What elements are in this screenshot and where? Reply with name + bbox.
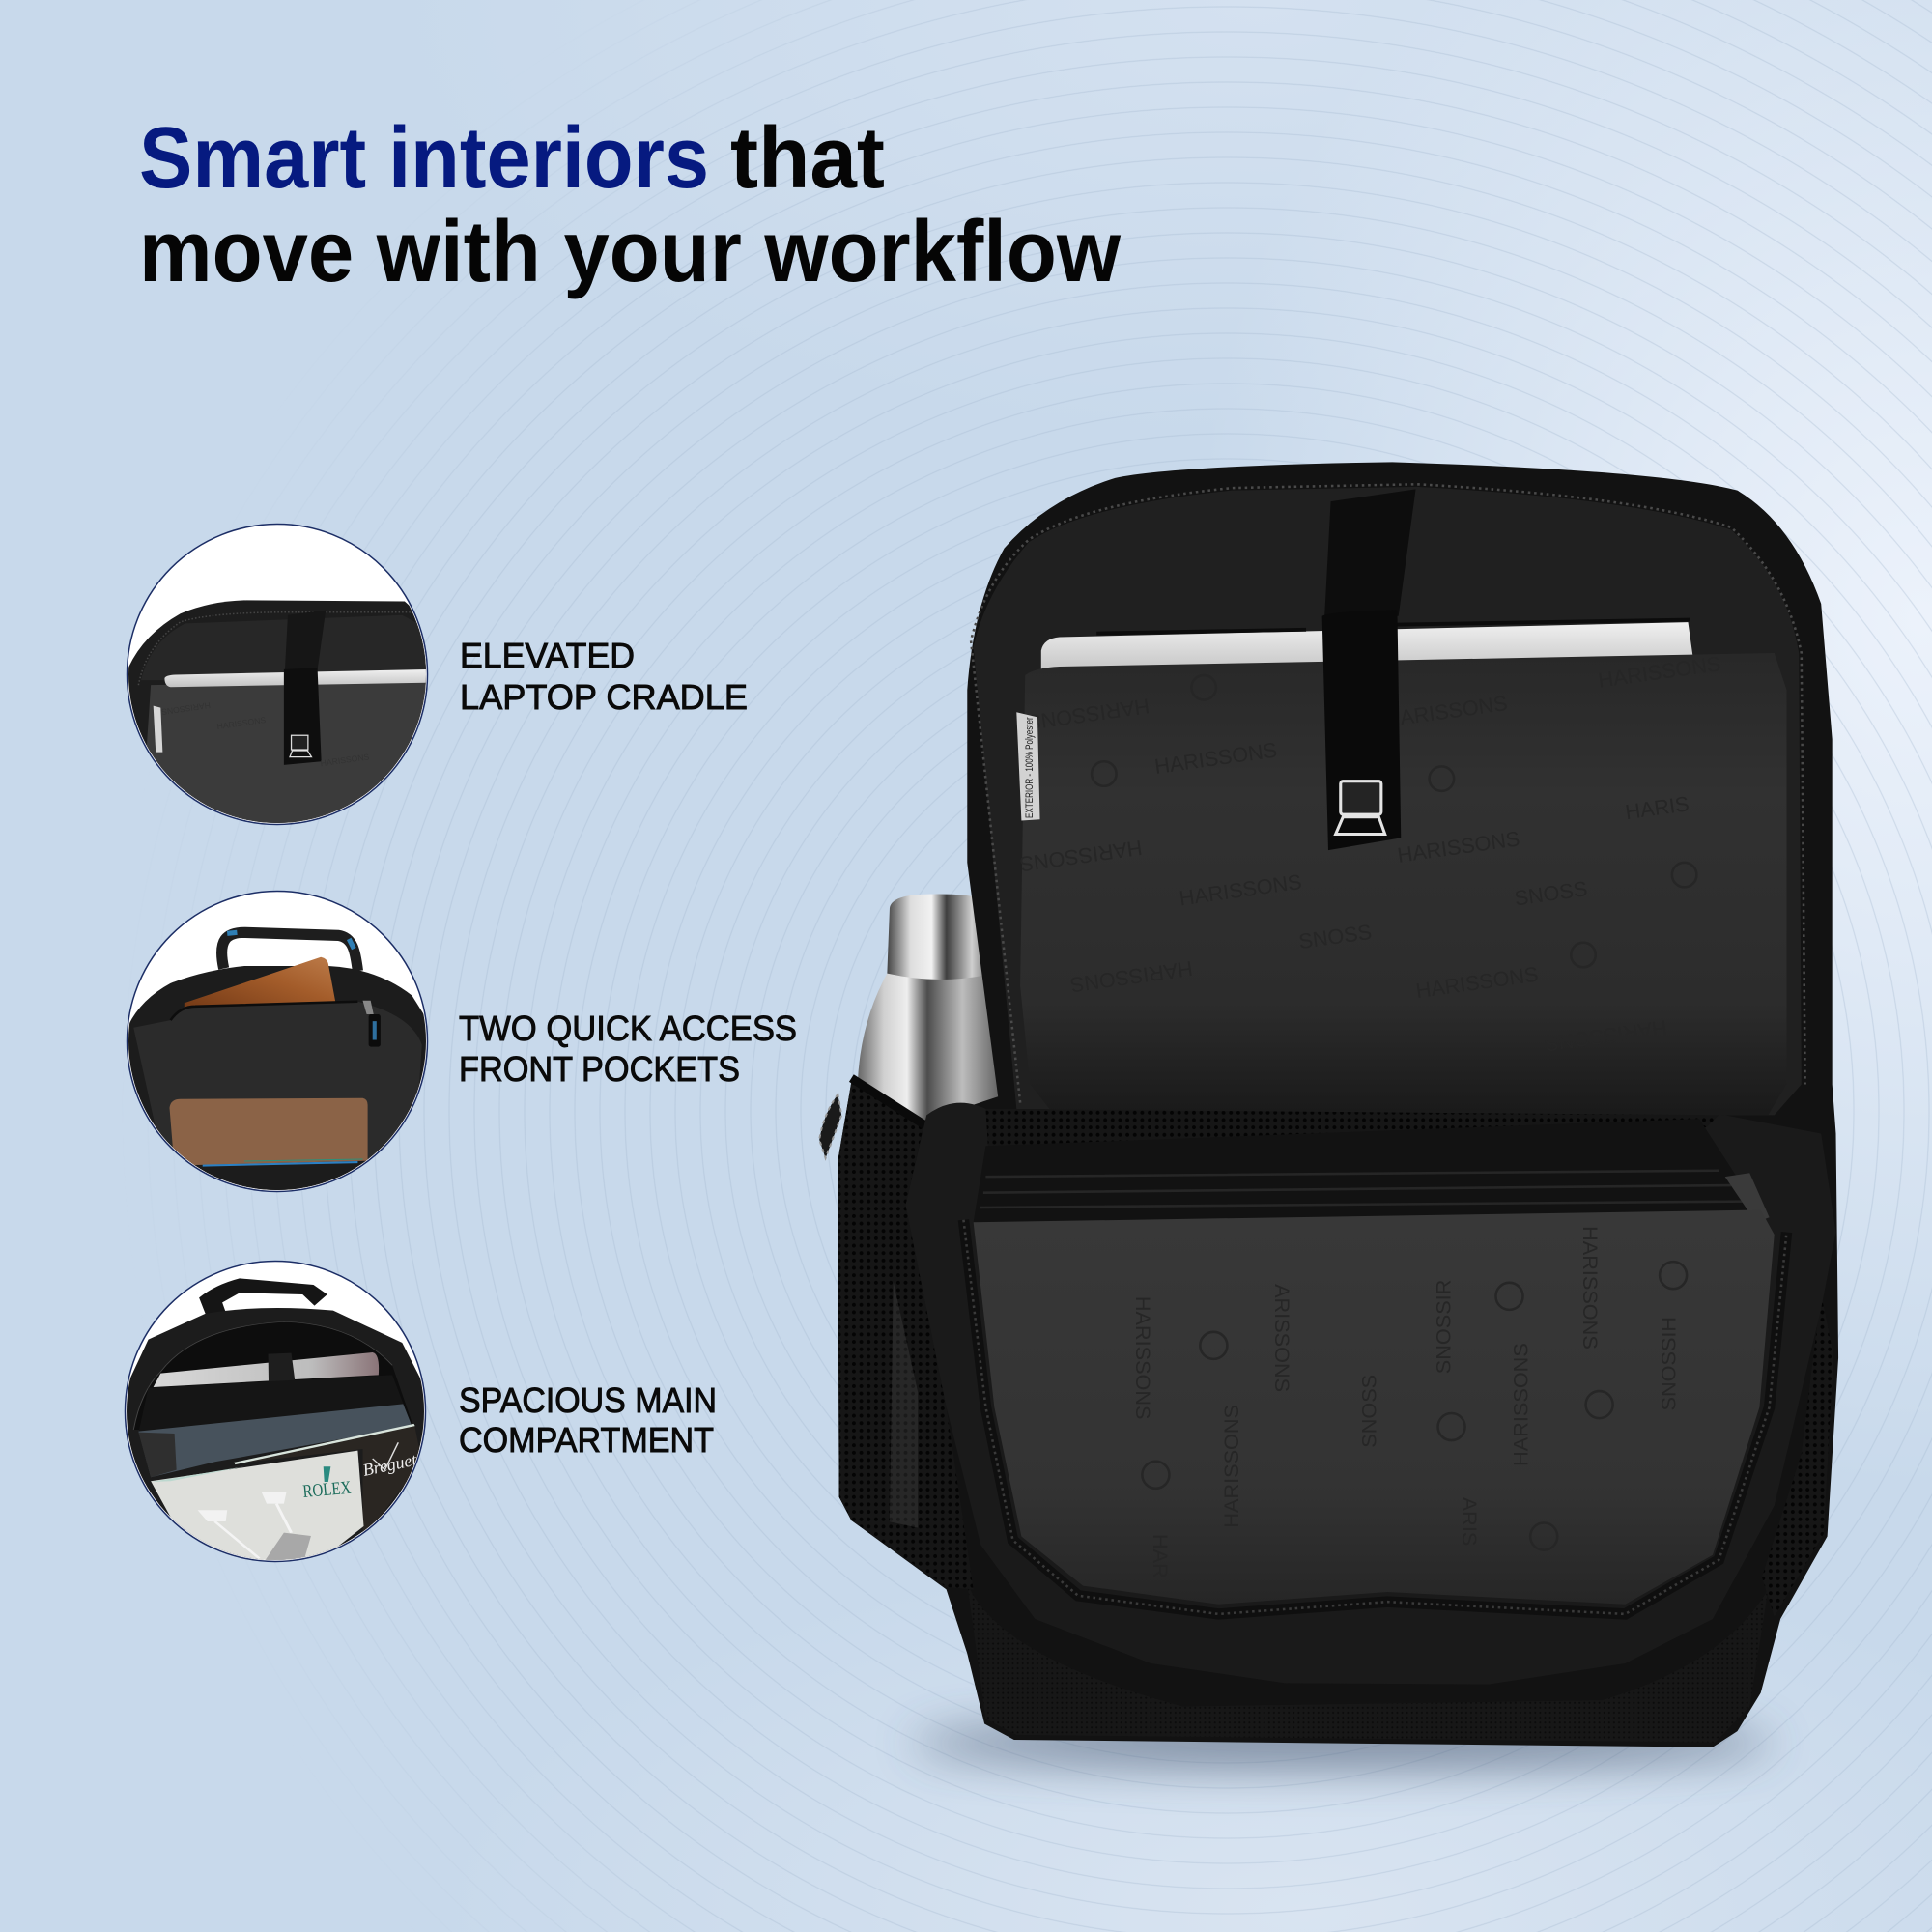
ground shadow bbox=[912, 1719, 1775, 1768]
panel: elevated laptop cradle circle: HARISSONS bbox=[320, 752, 370, 768]
embossed pattern upper: SNOSS bbox=[1297, 920, 1373, 953]
label tag bbox=[1016, 712, 1040, 820]
title line 1 black: that bbox=[730, 110, 885, 207]
embossed pattern upper: HARISSONS bbox=[1543, 1015, 1668, 1057]
zipper band bbox=[974, 1119, 1775, 1235]
laptop sleeve panel bbox=[1020, 653, 1786, 1119]
panel: elevated laptop cradle circle: HARISSONS bbox=[160, 700, 211, 717]
embossed pattern lower: HARISSONS bbox=[1578, 1226, 1603, 1350]
title line 1 blue: Smart interiors bbox=[139, 110, 709, 207]
panel: elevated laptop cradle circle: HARISSONS bbox=[216, 715, 267, 731]
panel: elevated laptop cradle circle bbox=[127, 524, 432, 828]
main backpack image bbox=[819, 462, 1838, 1768]
embossed pattern lower: SNOSSIR bbox=[1431, 1280, 1455, 1374]
zipper line upper bbox=[971, 484, 1805, 1103]
label: elevated laptop cradle bbox=[460, 636, 748, 717]
embossed pattern lower: HARISSONS bbox=[1509, 1343, 1533, 1466]
embossed pattern lower: HARISSONS bbox=[1219, 1405, 1243, 1528]
embossed pattern lower: ARISSONS bbox=[1270, 1284, 1294, 1392]
title bbox=[139, 110, 1122, 300]
strap with laptop icon bbox=[1322, 489, 1416, 850]
panel: front pockets circle bbox=[122, 891, 437, 1198]
mesh band above zipper bbox=[985, 1109, 1719, 1149]
back fabric base strip bbox=[967, 1583, 1768, 1743]
laptop bbox=[1041, 620, 1693, 675]
bottle body bbox=[858, 974, 1003, 1133]
label: two quick access front pockets: FRONT POCKETS bbox=[459, 1049, 740, 1089]
embossed pattern lower: HAR bbox=[1149, 1534, 1173, 1578]
infographic canvas bbox=[124, 124, 1839, 1797]
panel: spacious main compartment circle bbox=[122, 1262, 432, 1562]
embossed pattern upper: HARISSONS bbox=[1396, 826, 1521, 867]
embossed pattern upper: HARISSONS bbox=[1414, 962, 1540, 1003]
embossed pattern upper: HARISSONS bbox=[1178, 869, 1303, 910]
lower pocket panel bbox=[974, 1210, 1775, 1605]
embossed pattern lower: HARISSONS bbox=[1131, 1296, 1155, 1419]
title line 2: move with your workflow bbox=[139, 204, 1122, 300]
rolex logo text: ROLEX bbox=[302, 1478, 352, 1502]
embossed pattern upper: HARISSONS bbox=[1383, 691, 1509, 732]
label: spacious main compartment bbox=[459, 1380, 717, 1460]
embossed pattern upper: HARISSONS bbox=[1153, 737, 1279, 779]
bottle cap bbox=[887, 895, 993, 980]
embossed pattern upper: HARISSONS bbox=[1597, 651, 1722, 693]
label: two quick access front pockets bbox=[459, 1009, 797, 1089]
embossed pattern upper: HARISSONS bbox=[1068, 956, 1194, 997]
backpack body silhouette bbox=[838, 462, 1838, 1747]
embossed pattern lower: ARIS bbox=[1458, 1497, 1482, 1546]
pocket edge zipper bbox=[963, 1220, 1786, 1614]
embossed pattern upper: HARIS bbox=[1624, 791, 1690, 824]
label tag: EXTERIOR - 100% Polyester bbox=[1024, 717, 1036, 818]
embossed pattern lower: SNOSSIH bbox=[1657, 1317, 1681, 1410]
label: elevated laptop cradle: ELEVATED bbox=[460, 636, 635, 675]
label: elevated laptop cradle: LAPTOP CRADLE bbox=[460, 677, 748, 717]
front flap bbox=[905, 1103, 1836, 1685]
breguet script text: Breguet bbox=[361, 1449, 419, 1480]
upper interior bbox=[974, 487, 1802, 1115]
bottle bbox=[858, 895, 1003, 1133]
label: two quick access front pockets: TWO QUICK ACCESS bbox=[459, 1009, 797, 1048]
embossed pattern upper bbox=[1018, 651, 1722, 1057]
embossed pattern upper: HARISSONS bbox=[1018, 836, 1144, 876]
label: spacious main compartment: COMPARTMENT bbox=[459, 1420, 714, 1460]
embossed pattern lower: SNOSS bbox=[1357, 1375, 1381, 1448]
embossed pattern upper: SNOSS bbox=[1513, 876, 1589, 910]
zipper pull bbox=[819, 1094, 841, 1158]
embossed pattern upper: HARISSONS bbox=[1026, 694, 1151, 735]
embossed pattern lower bbox=[1131, 1226, 1687, 1578]
mesh side pocket bbox=[819, 1078, 1833, 1616]
label: spacious main compartment: SPACIOUS MAIN bbox=[459, 1380, 717, 1420]
